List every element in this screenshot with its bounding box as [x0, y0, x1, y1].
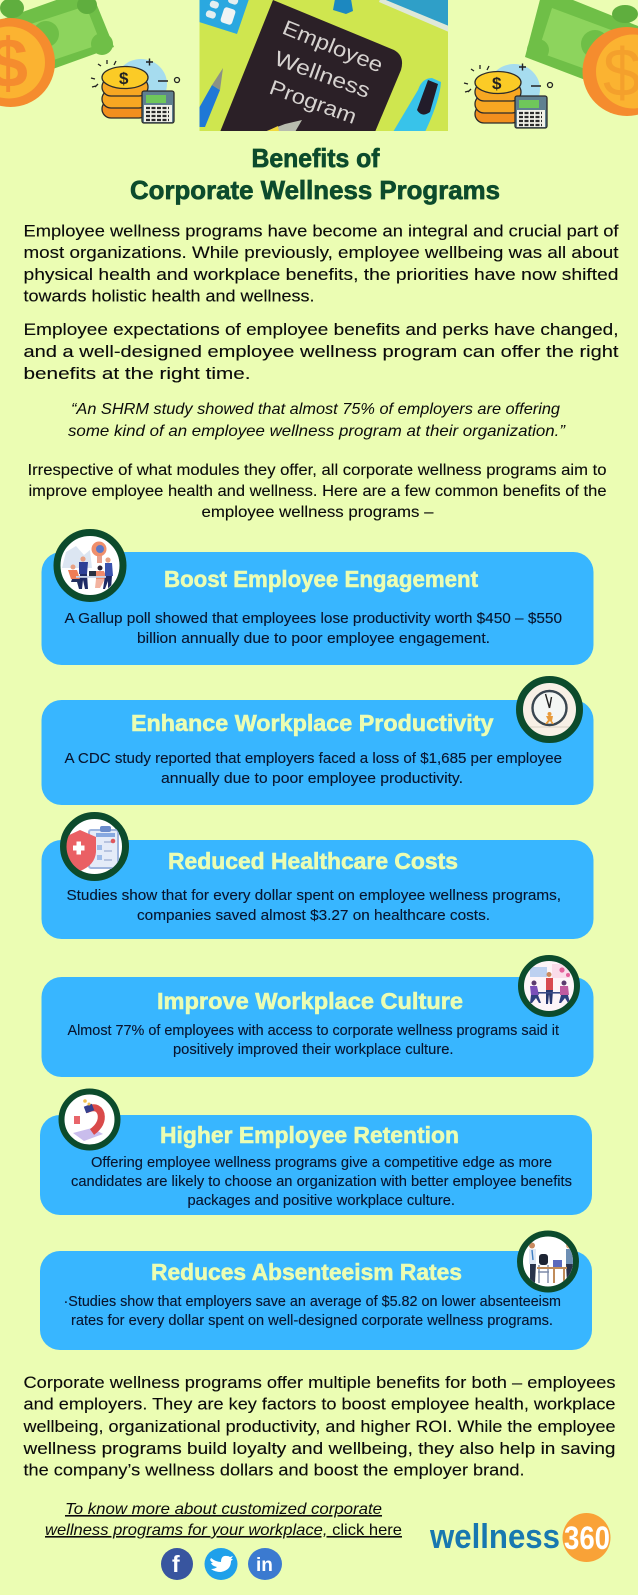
highlighter	[393, 78, 441, 132]
intro paragraph 1: physical health and workplace benefits, the priorities have now shifted	[24, 265, 618, 284]
panel: reduced healthcare costs: companies saved almost $3.27 on healthcare costs.	[137, 907, 490, 924]
panel: improve workplace culture: positively improved their workplace culture.	[173, 1041, 454, 1058]
title: Corporate Wellness Programs	[130, 175, 500, 205]
intro paragraph 2: Employee expectations of employee benefits and perks have changed,	[24, 320, 618, 339]
laptop	[89, 571, 96, 576]
panel: reduced healthcare costs: Reduced Healthcare Costs	[168, 848, 458, 874]
handwriting: Employee	[279, 16, 386, 77]
quote: “An SHRM study showed that almost 75% of employers are offering	[71, 401, 560, 418]
handwriting: Wellness	[271, 47, 373, 103]
icon: clock	[520, 680, 580, 740]
panel: higher employee retention: Offering employee wellness programs give a competitive edge as more	[91, 1154, 552, 1171]
icon: coins and calculator right: $	[492, 74, 502, 93]
panel: higher employee retention: packages and positive workplace culture.	[188, 1192, 455, 1209]
handwriting	[270, 20, 381, 124]
call to action link: wellness programs for your workplace, click here	[45, 1522, 402, 1539]
icon: money left	[0, 0, 114, 107]
binder clip	[333, 0, 353, 14]
lead-in text: Irrespective of what modules they offer, all corporate wellness programs aim to	[28, 462, 607, 479]
social icons	[161, 1548, 282, 1580]
icon: empty desk	[520, 1234, 576, 1290]
panel: reduced healthcare costs	[42, 816, 594, 939]
pen tip	[266, 120, 302, 131]
call to action link	[45, 1501, 402, 1539]
logo: wellness360: wellness	[429, 1518, 560, 1556]
panel: enhance workplace productivity: annually due to poor employee productivity.	[161, 770, 463, 787]
icon: facebook: f	[172, 1551, 180, 1577]
call to action link: To know more about customized corporate	[65, 1501, 382, 1518]
intro paragraph 1: most organizations. While previously, employee wellbeing was all about	[24, 243, 619, 262]
closing paragraph	[22, 1373, 616, 1480]
panel: enhance workplace productivity: A CDC study reported that employers faced a loss of $1,685 per employee	[64, 750, 562, 767]
closing paragraph: wellness programs build loyalty and wellbeing, they also help in saving	[22, 1439, 616, 1458]
intro paragraph 1	[24, 222, 619, 306]
book	[379, 0, 449, 32]
panel: enhance workplace productivity: Enhance Workplace Productivity	[131, 710, 494, 736]
panel: reduces absenteeism rates	[40, 1234, 592, 1350]
woman	[98, 566, 102, 570]
title	[130, 143, 500, 205]
icon: coins and calculator left: $	[119, 69, 129, 88]
panel: higher employee retention	[40, 1092, 592, 1215]
panel: enhance workplace productivity	[42, 680, 594, 805]
logo: wellness360: 360	[564, 1520, 610, 1556]
icon: team with lightbulb	[57, 532, 123, 598]
panel: boost employee engagement	[42, 532, 594, 665]
panel: boost employee engagement: Boost Employee Engagement	[164, 566, 478, 592]
panel: reduced healthcare costs: Studies show that for every dollar spent on employee wellness programs,	[66, 887, 561, 904]
intro paragraph 1: towards holistic health and wellness.	[24, 286, 314, 306]
panel: boost employee engagement: A Gallup poll showed that employees lose productivity worth $450 – $550	[64, 610, 562, 627]
icon: coins and calculator right	[464, 64, 552, 128]
intro paragraph 1: Employee wellness programs have become an integral and crucial part of	[24, 222, 619, 240]
panel: higher employee retention: candidates are likely to choose an organization with better employee benefits	[71, 1173, 572, 1190]
quote	[68, 401, 566, 440]
calculator	[199, 0, 249, 34]
person standing	[80, 556, 86, 562]
notebook	[220, 0, 402, 132]
panel: reduces absenteeism rates: ·Studies show that employers save an average of $5.82 on lower absenteeism	[64, 1293, 561, 1310]
lead-in text: employee wellness programs –	[202, 504, 434, 521]
icon: magnet	[62, 1092, 118, 1148]
photo: employee wellness program notebook	[199, 0, 449, 132]
panel: improve workplace culture: Almost 77% of employees with access to corporate wellness programs said it	[68, 1022, 560, 1039]
panel: reduces absenteeism rates: Reduces Absenteeism Rates	[151, 1259, 462, 1285]
closing paragraph: and employers. They are key factors to boost employee health, workplace	[24, 1394, 616, 1414]
handwriting: Program	[266, 76, 360, 129]
icon: health shield and clipboard	[64, 816, 126, 878]
closing paragraph: Corporate wellness programs offer multiple benefits for both – employees	[24, 1373, 616, 1392]
panel: boost employee engagement: billion annually due to poor employee engagement.	[137, 630, 490, 647]
table	[76, 576, 106, 578]
intro paragraph 2	[24, 320, 619, 383]
intro paragraph 2: benefits at the right time.	[24, 364, 250, 383]
panel: reduces absenteeism rates: rates for every dollar spent on well-designed corporate wellness programs.	[71, 1312, 553, 1329]
lead-in text: improve employee health and wellness. Here are a few common benefits of the	[28, 483, 606, 500]
logo: wellness360	[429, 1513, 610, 1562]
icon: twitter	[204, 1548, 238, 1580]
intro paragraph 2: and a well-designed employee wellness program can offer the right	[24, 342, 619, 361]
icon: money right	[525, 0, 638, 116]
icon: team presentation	[521, 958, 577, 1014]
closing paragraph: the company’s wellness dollars and boost the employer brand.	[24, 1460, 524, 1480]
lead-in text	[28, 462, 607, 521]
pen	[199, 68, 223, 127]
quote: some kind of an employee wellness program at their organization.”	[68, 423, 566, 440]
panel: improve workplace culture: Improve Workplace Culture	[157, 988, 463, 1014]
icon: linkedin: in	[256, 1555, 273, 1576]
person seated left	[70, 564, 76, 570]
icon: coins and calculator left	[91, 58, 180, 123]
closing paragraph: wellbeing, organizational productivity, and higher ROI. While the employee	[22, 1417, 616, 1436]
panel: higher employee retention: Higher Employee Retention	[160, 1122, 459, 1148]
panel: improve workplace culture	[42, 958, 594, 1077]
person right	[105, 557, 111, 563]
title: Benefits of	[252, 143, 380, 173]
